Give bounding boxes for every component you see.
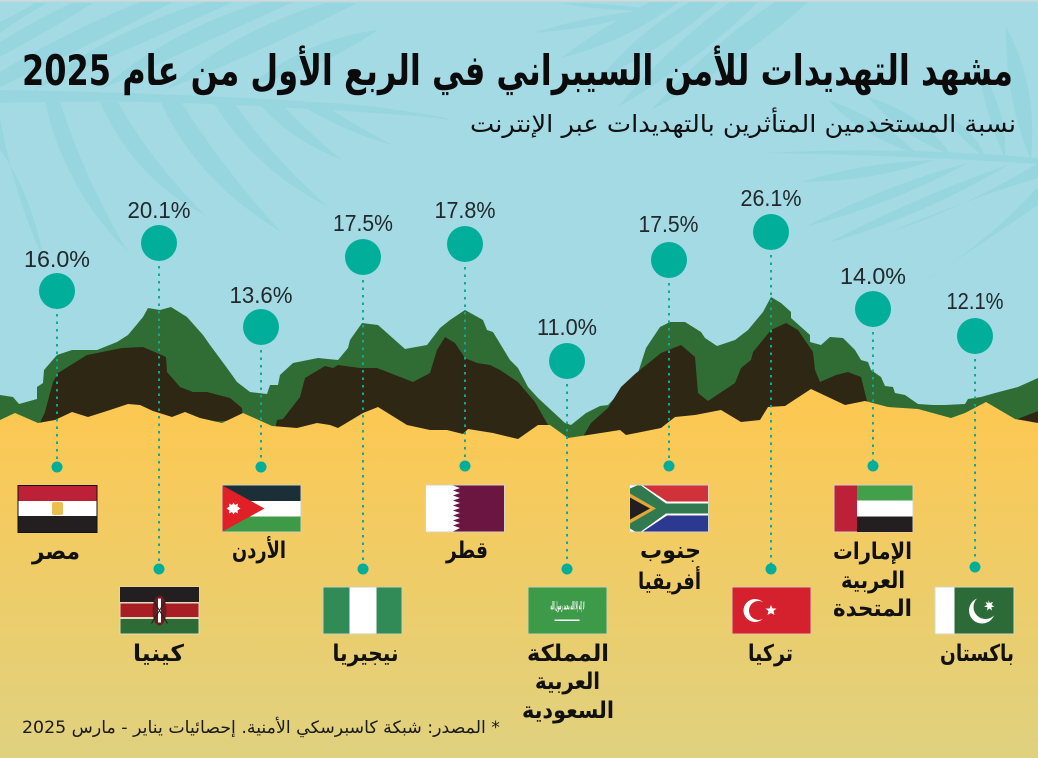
flag: Nigeria <box>322 586 402 634</box>
flag: UAE <box>834 484 914 532</box>
country: Jordan <box>222 282 302 564</box>
name: أفريقيا <box>638 565 701 595</box>
name: كينيا <box>133 641 185 667</box>
name: الإمارات <box>833 539 912 565</box>
flag: Pakistan <box>934 586 1014 634</box>
source note: * المصدر: شبكة كاسبرسكي الأمنية. إحصائيات يناير - مارس 2025 <box>22 717 500 738</box>
name: مصر <box>31 539 80 565</box>
country: Nigeria <box>322 210 402 667</box>
name: المملكة <box>527 641 609 667</box>
name: باكستان <box>940 641 1014 667</box>
value: 12.1% <box>946 288 1004 314</box>
country: Turkey <box>732 185 812 667</box>
country: South Africa <box>629 211 709 595</box>
country: Saudi Arabia <box>522 314 614 724</box>
name <box>833 539 912 622</box>
name: جنوب <box>640 538 701 564</box>
flag: Egypt <box>18 485 98 533</box>
flag: Turkey <box>732 586 812 634</box>
country: UAE <box>833 263 914 622</box>
flag: Saudi Arabia <box>528 586 608 634</box>
country: Kenya <box>120 197 200 667</box>
value: 13.6% <box>230 282 292 308</box>
value: 26.1% <box>740 185 802 211</box>
value: 14.0% <box>840 263 906 289</box>
name: تركيا <box>748 641 793 667</box>
name: العربية <box>535 669 600 695</box>
value: 17.8% <box>434 197 496 223</box>
value: 11.0% <box>537 314 597 340</box>
country: Qatar <box>425 197 505 564</box>
flag: Kenya <box>120 586 200 634</box>
name: المتحدة <box>833 596 912 622</box>
back green mountains <box>0 297 1038 450</box>
country: Egypt <box>18 246 98 565</box>
name: الأردن <box>232 535 286 564</box>
flag: Qatar <box>425 484 505 532</box>
dark mountains <box>39 323 1038 445</box>
flag: Jordan <box>222 484 302 532</box>
name: نيجيريا <box>332 641 398 667</box>
value: 17.5% <box>333 210 393 236</box>
name <box>522 641 614 724</box>
subtitle: نسبة المستخدمين المتأثرين بالتهديدات عبر الإنترنت <box>470 107 1016 138</box>
name <box>638 538 701 595</box>
value: 20.1% <box>128 197 190 223</box>
flag: South Africa <box>629 484 709 532</box>
name: العربية <box>841 568 905 594</box>
value: 16.0% <box>24 246 90 272</box>
value: 17.5% <box>638 211 698 237</box>
sand ground <box>0 389 1038 758</box>
name: السعودية <box>522 698 614 724</box>
text: لا إله إلا الله محمد رسول الله <box>550 600 584 612</box>
name: قطر <box>445 538 488 564</box>
palm leaves background <box>0 2 1038 287</box>
country: Pakistan <box>934 288 1014 667</box>
